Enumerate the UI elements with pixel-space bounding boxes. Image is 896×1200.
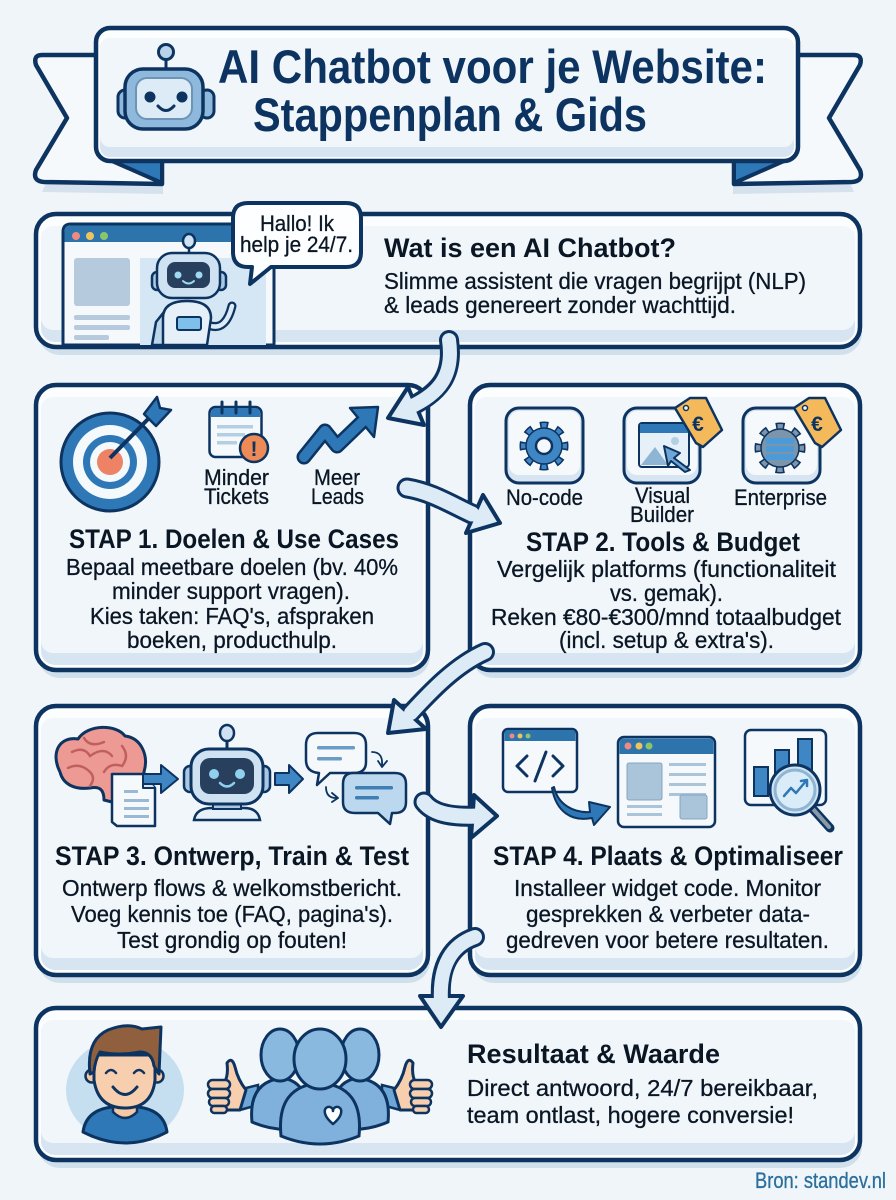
- icon: chat bubbles: [306, 733, 406, 824]
- text: stap 3: Test grondig op fouten!: [117, 927, 347, 953]
- label: meer leads: [311, 465, 364, 509]
- label: meer leads: Meer: [314, 465, 360, 490]
- text: stap 1: Bepaal meetbare doelen (bv. 40%: [66, 554, 398, 580]
- text: stap 3: [62, 875, 402, 953]
- panel: stap 3: [36, 706, 430, 983]
- icon: visual builder tile: [624, 408, 700, 483]
- icon: analytics with magnifier: [745, 730, 830, 828]
- icon: calendar with alert: !: [250, 438, 258, 461]
- panel: stap 1: [36, 385, 430, 678]
- icon: document: [112, 774, 155, 826]
- arrow: intro to stap 1: [388, 340, 450, 425]
- labels: tool types: [506, 483, 827, 527]
- banner panel: [96, 28, 798, 161]
- labels: tool types: Enterprise: [734, 485, 827, 510]
- icon: web page window: [618, 737, 715, 827]
- text: stap 2: vs. gemak).: [610, 580, 723, 606]
- text: stap 4: gedreven voor betere resultaten.: [506, 927, 829, 953]
- left ribbon: [35, 55, 163, 194]
- panel: stap 4: [470, 706, 862, 983]
- panel: resultaat en waarde: [36, 1008, 862, 1168]
- text: stap 3: Voeg kennis toe (FAQ, pagina's).: [71, 901, 393, 927]
- icon: thumbs up left: [208, 1060, 258, 1113]
- title banner: [35, 28, 861, 194]
- icon: rising arrow: [304, 407, 378, 457]
- label: meer leads: Leads: [311, 484, 364, 509]
- icon: no-code gear tile: [506, 408, 583, 483]
- arrow: stap 2 to stap 3: [388, 652, 485, 733]
- intro text: & leads genereert zonder wachttijd.: [384, 292, 736, 318]
- label: minder tickets: Minder: [204, 465, 269, 490]
- text: stap 4: Installeer widget code. Monitor: [514, 875, 821, 901]
- text: stap 2: (incl. setup & extra's).: [559, 627, 774, 653]
- icon: brain: [56, 727, 145, 802]
- icon: euro price tag enterprise: €: [811, 413, 823, 436]
- title text: AI Chatbot voor je Website:: [218, 40, 767, 93]
- heading: stap 4: STAP 4. Plaats & Optimaliseer: [493, 841, 843, 871]
- text: stap 1: boeken, producthulp.: [127, 627, 337, 653]
- speech bubble: [233, 203, 361, 284]
- arrow: stap 4 to resultaat: [420, 937, 475, 1027]
- arrow: stap 3 to stap 4: [424, 795, 497, 838]
- arrow: brain to robot: [143, 765, 178, 793]
- label: minder tickets: [204, 465, 269, 509]
- text: stap 2: [491, 556, 841, 653]
- labels: tool types: No-code: [506, 485, 583, 510]
- arrow: robot to chat: [275, 765, 303, 793]
- right ribbon: [733, 55, 861, 194]
- text: stap 1: [66, 554, 398, 653]
- label: minder tickets: Tickets: [204, 484, 269, 509]
- panel: wat is een AI chatbot: [36, 203, 862, 355]
- icon: euro price tag: [675, 398, 722, 447]
- speech bubble: help je 24/7.: [240, 232, 353, 257]
- icon: browser window with robot: [63, 224, 274, 345]
- text: resultaat: [467, 1075, 818, 1128]
- speech bubble: Hallo! Ik: [260, 211, 335, 236]
- icon: robot head: [118, 44, 214, 129]
- text: stap 3: Ontwerp flows & welkomstbericht.: [62, 875, 402, 901]
- intro text: [384, 233, 806, 318]
- arrow: stap 1 to stap 2: [407, 488, 500, 533]
- icon: euro price tag enterprise: [794, 398, 841, 447]
- text: stap 4: gesprekken & verbeter data-: [526, 901, 810, 927]
- icon: team of people: [252, 1029, 388, 1144]
- icon: thumbs up right: [382, 1060, 432, 1113]
- text: stap 1: Kies taken: FAQ's, afspraken: [90, 603, 374, 629]
- icon: happy person: [66, 1026, 184, 1143]
- heading: stap 2: STAP 2. Tools & Budget: [526, 527, 800, 557]
- labels: tool types: Visual: [635, 483, 690, 508]
- intro text: Wat is een AI Chatbot?: [384, 233, 676, 263]
- icon: euro price tag: €: [692, 413, 704, 436]
- panel: stap 2: [470, 385, 862, 678]
- icon: calendar with alert: [210, 402, 268, 462]
- text: stap 4: [506, 875, 829, 953]
- icon: target with arrow: [61, 397, 171, 511]
- heading: stap 3: STAP 3. Ontwerp, Train & Test: [55, 841, 409, 871]
- icon: robot: [184, 725, 270, 820]
- labels: tool types: Builder: [630, 502, 694, 527]
- heading: stap 1: STAP 1. Doelen & Use Cases: [69, 524, 399, 554]
- text: stap 2: Vergelijk platforms (functionaliteit: [497, 556, 836, 582]
- title text: Stappenplan & Gids: [253, 88, 647, 141]
- intro text: Slimme assistent die vragen begrijpt (NLP): [384, 268, 806, 294]
- text: resultaat: Direct antwoord, 24/7 bereikbaar,: [467, 1075, 818, 1101]
- arrow: code to page: [552, 787, 610, 825]
- icon: enterprise tile: [743, 408, 820, 483]
- icon: code window: [503, 729, 577, 792]
- text: stap 1: minder support vragen).: [112, 578, 350, 604]
- text: stap 2: Reken €80-€300/mnd totaalbudget: [491, 604, 841, 630]
- heading: resultaat: Resultaat & Waarde: [467, 1039, 720, 1069]
- text: resultaat: team ontlast, hogere conversie!: [467, 1102, 794, 1128]
- icon: waving robot: [152, 234, 232, 345]
- title text: [218, 40, 767, 141]
